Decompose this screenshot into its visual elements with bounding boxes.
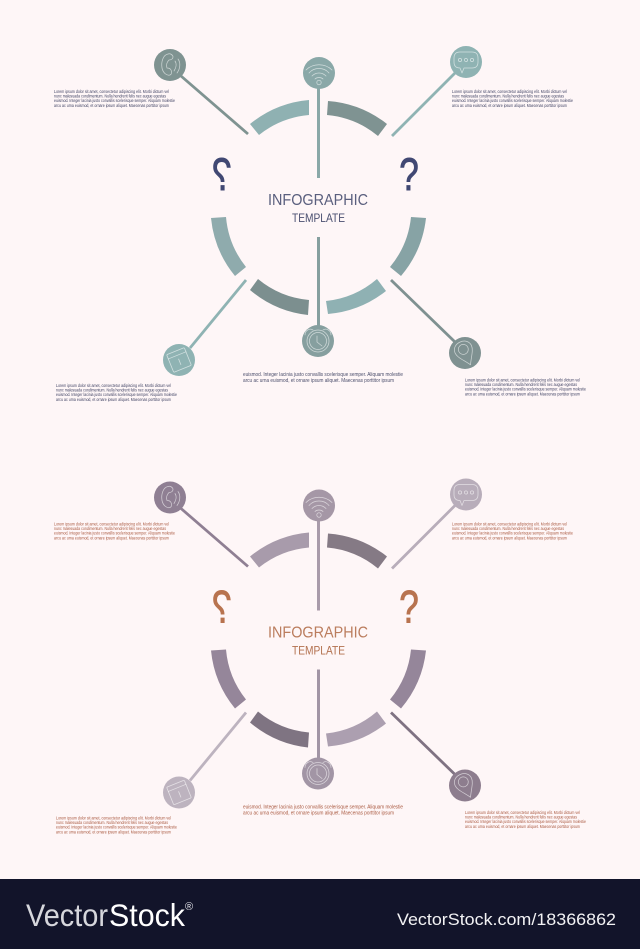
text block: bottom left: euismod. Integer lacinia justo convallis scelerisque semper. Aliquam molestie — [56, 825, 177, 830]
text block: bottom right: nunc malesuada condimentum. Nulla hendrerit felis nec augue egestas — [465, 815, 578, 820]
text block: bottom right: nunc malesuada condimentum. Nulla hendrerit felis nec augue egestas — [465, 382, 578, 387]
arc: right — [390, 217, 426, 276]
text block: top right: arcu ac urna euismod, et ornare ipsum aliquet. Maecenas porttitor ipsum — [452, 535, 567, 540]
question mark: left: ? — [212, 581, 232, 633]
title: INFOGRAPHIC — [268, 624, 368, 642]
text block: top left: nunc malesuada condimentum. Nulla hendrerit felis nec augue egestas — [54, 94, 167, 99]
footer bar — [0, 879, 640, 949]
text block: top right: arcu ac urna euismod, et ornare ipsum aliquet. Maecenas porttitor ipsum — [452, 103, 567, 108]
text block: bottom centre: arcu ac urna euismod, et ornare ipsum aliquet. Maecenas porttitor ipsum — [243, 810, 394, 816]
subtitle: TEMPLATE — [292, 646, 345, 658]
logo: VectorStock wordmark: ® — [185, 901, 193, 913]
text block: top right — [452, 522, 573, 540]
connector: top right — [392, 73, 455, 136]
arc: bottom right — [326, 712, 386, 746]
text block: top left: nunc malesuada condimentum. Nulla hendrerit felis nec augue egestas — [54, 526, 167, 531]
text block: top right: Lorem ipsum dolor sit amet, consectetur adipiscing elit. Morbi dictum vel — [452, 522, 567, 526]
icon: alarm clock — [302, 325, 334, 357]
text block: bottom right — [465, 810, 586, 829]
icon: calendar — [163, 776, 195, 808]
connector: top left — [181, 76, 248, 134]
text block: top left: arcu ac urna euismod, et ornare ipsum aliquet. Maecenas porttitor ipsum — [54, 535, 169, 540]
panel: mauve infographic — [54, 478, 586, 834]
text block: top right: euismod. Integer lacinia justo convallis scelerisque semper. Aliquam molestie — [452, 531, 573, 536]
text block: bottom left: Lorem ipsum dolor sit amet, consectetur adipiscing elit. Morbi dictum vel — [56, 816, 171, 820]
text block: bottom right: Lorem ipsum dolor sit amet, consectetur adipiscing elit. Morbi dictum vel — [465, 810, 580, 815]
icon: speech bubble — [450, 478, 482, 510]
icon: calendar — [163, 344, 195, 376]
question mark: right: ? — [399, 581, 419, 633]
text block: bottom left: nunc malesuada condimentum. Nulla hendrerit felis nec augue egestas — [56, 820, 169, 825]
text block: bottom right: arcu ac urna euismod, et ornare ipsum aliquet. Maecenas porttitor ipsum — [465, 824, 580, 829]
text block: top right: nunc malesuada condimentum. Nulla hendrerit felis nec augue egestas — [452, 526, 565, 531]
text block: top right: Lorem ipsum dolor sit amet, consectetur adipiscing elit. Morbi dictum vel — [452, 89, 567, 94]
text block: top left — [54, 89, 175, 108]
text block: top right — [452, 89, 573, 108]
text block: bottom left — [56, 383, 177, 402]
text block: top left: Lorem ipsum dolor sit amet, consectetur adipiscing elit. Morbi dictum vel — [54, 522, 169, 526]
icon: alarm clock — [302, 758, 334, 790]
text block: bottom left: arcu ac urna euismod, et ornare ipsum aliquet. Maecenas porttitor ipsum — [56, 397, 171, 402]
arc: bottom left — [250, 279, 309, 315]
text block: bottom left: arcu ac urna euismod, et ornare ipsum aliquet. Maecenas porttitor ipsum — [56, 829, 171, 834]
text block: bottom right: Lorem ipsum dolor sit amet, consectetur adipiscing elit. Morbi dictum vel — [465, 378, 580, 382]
text block: top left: Lorem ipsum dolor sit amet, consectetur adipiscing elit. Morbi dictum vel — [54, 89, 169, 94]
icon: wifi — [303, 57, 335, 89]
connector: bottom right — [391, 280, 455, 342]
logo: VectorStock wordmark: Vector — [26, 897, 108, 933]
text block: bottom right: arcu ac urna euismod, et ornare ipsum aliquet. Maecenas porttitor ipsum — [465, 391, 580, 396]
subtitle: TEMPLATE — [292, 213, 345, 225]
arc: top right — [327, 101, 387, 136]
arc: top left — [250, 100, 309, 135]
text block: top left: euismod. Integer lacinia justo convallis scelerisque semper. Aliquam molestie — [54, 531, 175, 536]
icon: speech bubble — [450, 46, 482, 78]
text block: bottom centre: euismod. Integer lacinia justo convallis scelerisque semper. Aliquam molestie — [243, 372, 403, 378]
text block: bottom left: euismod. Integer lacinia justo convallis scelerisque semper. Aliquam molestie — [56, 392, 177, 397]
icon: wifi — [303, 490, 335, 522]
arc: bottom left — [250, 712, 309, 748]
text block: top left: arcu ac urna euismod, et ornare ipsum aliquet. Maecenas porttitor ipsum — [54, 103, 169, 108]
question mark: left: ? — [212, 149, 232, 200]
text block: bottom right: euismod. Integer lacinia justo convallis scelerisque semper. Aliquam molestie — [465, 387, 586, 392]
arc: bottom right — [326, 279, 386, 314]
connector: bottom right — [391, 712, 455, 774]
connector: bottom left — [190, 280, 246, 348]
image reference url: VectorStock.com/18366862 — [397, 910, 616, 929]
icon: phone — [154, 482, 186, 514]
question mark: right: ? — [399, 149, 419, 200]
title: INFOGRAPHIC — [268, 192, 368, 209]
icon: map pin — [449, 337, 481, 369]
connector: bottom centre — [317, 237, 320, 330]
text block: bottom centre — [243, 804, 403, 816]
text block: bottom centre: euismod. Integer lacinia justo convallis scelerisque semper. Aliquam molestie — [243, 804, 403, 810]
text block: bottom centre — [243, 372, 403, 384]
arc: left — [211, 217, 246, 276]
text block: top left: euismod. Integer lacinia justo convallis scelerisque semper. Aliquam molestie — [54, 98, 175, 103]
logo: VectorStock wordmark: Stock — [109, 897, 185, 933]
text block: bottom right — [465, 378, 586, 396]
text block: bottom left: nunc malesuada condimentum. Nulla hendrerit felis nec augue egestas — [56, 388, 169, 393]
arc: left — [211, 650, 246, 708]
connector: bottom centre — [317, 670, 320, 762]
connector: bottom left — [190, 712, 246, 780]
icon: phone — [154, 49, 186, 81]
text block: bottom right: euismod. Integer lacinia justo convallis scelerisque semper. Aliquam molestie — [465, 819, 586, 824]
panel: teal infographic — [54, 46, 586, 402]
text block: bottom left: Lorem ipsum dolor sit amet, consectetur adipiscing elit. Morbi dictum vel — [56, 383, 171, 388]
connector: top right — [392, 506, 455, 568]
connector: top centre — [317, 85, 320, 178]
text block: top right: euismod. Integer lacinia justo convallis scelerisque semper. Aliquam molestie — [452, 98, 573, 103]
icon: map pin — [449, 770, 481, 802]
text block: top right: nunc malesuada condimentum. Nulla hendrerit felis nec augue egestas — [452, 94, 565, 99]
arc: top right — [327, 534, 387, 568]
connector: top centre — [317, 518, 320, 610]
text block: bottom centre: arcu ac urna euismod, et ornare ipsum aliquet. Maecenas porttitor ipsum — [243, 378, 394, 384]
logo: VectorStock wordmark — [26, 897, 193, 933]
arc: right — [390, 650, 426, 708]
text block: top left — [54, 522, 175, 540]
text block: bottom left — [56, 816, 177, 834]
arc: top left — [250, 532, 309, 568]
connector: top left — [181, 508, 248, 566]
